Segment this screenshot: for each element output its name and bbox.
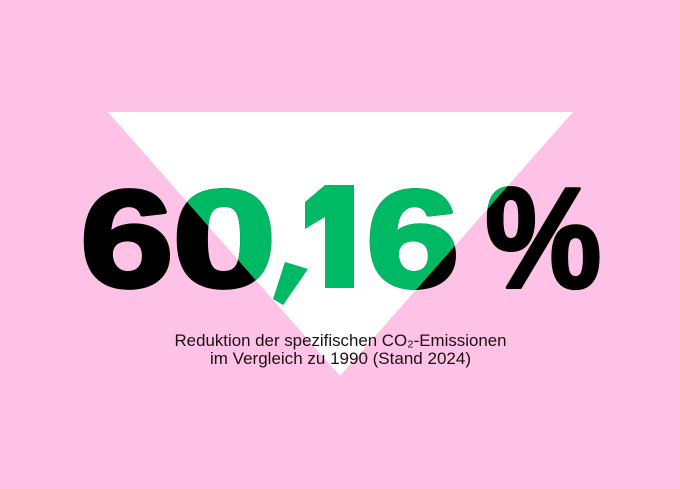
headline number in green, clipped to the triangle: % (485, 159, 602, 319)
headline number in black: 6 (80, 162, 174, 316)
headline number in green, clipped to the triangle: 1 (291, 162, 385, 317)
headline number in green, clipped to the triangle: , (272, 160, 310, 314)
headline number in green, clipped to the triangle: 6 (366, 162, 460, 316)
headline number in green, clipped to the triangle: 0 (172, 162, 276, 316)
white downward triangle (108, 112, 573, 376)
headline number in black (80, 159, 602, 319)
headline number in green, clipped to the triangle (187, 185, 508, 305)
headline number in black: 0 (172, 162, 276, 316)
caption: im Vergleich zu 1990 (Stand 2024) (210, 349, 471, 368)
caption: Reduktion der spezifischen CO₂-Emissionen (174, 331, 506, 350)
headline number in green, clipped to the triangle: 6 (80, 162, 174, 316)
headline number in black: % (485, 159, 602, 319)
headline number in black: 6 (366, 162, 460, 316)
caption (174, 331, 506, 368)
